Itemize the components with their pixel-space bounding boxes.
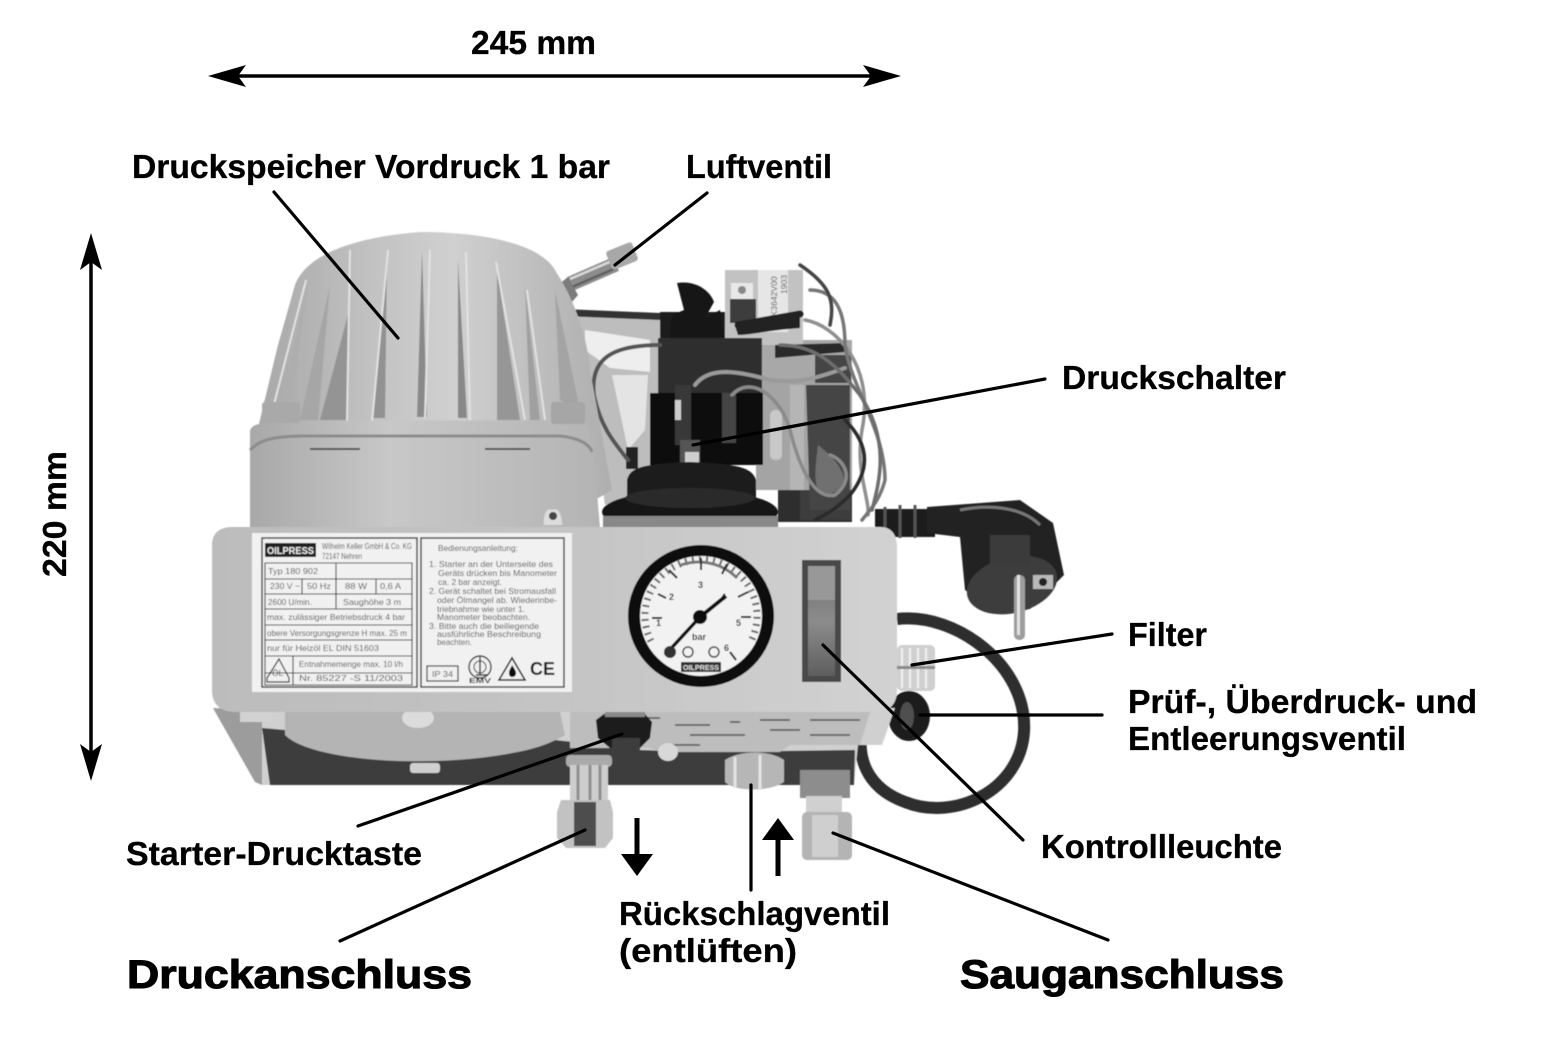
rating plate sticker: Typ 180 902 — [268, 566, 318, 576]
pressure gauge: 4 — [721, 592, 726, 602]
brand logo: OILPRESS — [267, 546, 314, 557]
pressure gauge — [628, 545, 774, 687]
rating plate sticker: Entnahmemenge max. 10 l/h — [299, 659, 403, 669]
check valve — [725, 752, 784, 790]
pressure gauge: OILPRESS — [683, 663, 719, 672]
pressure gauge: 5 — [736, 618, 741, 628]
pressure outlet fitting — [557, 755, 613, 848]
label: Sauganschluss: Sauganschluss — [960, 953, 1284, 997]
operating instructions: ausführliche Beschreibung — [437, 629, 541, 639]
operating instructions — [429, 543, 557, 647]
flame warning triangle — [499, 658, 525, 680]
operating instructions: Bedienungsanleitung: — [438, 543, 518, 553]
rating plate sticker: 88 W — [345, 581, 368, 591]
mains cable and plug — [875, 500, 1064, 640]
suction inlet fitting — [800, 770, 852, 860]
rating plate sticker: Saughöhe 3 m — [343, 597, 401, 607]
rating plate sticker: 2600 U/min. — [268, 597, 312, 607]
operating instructions: oder Ölmangel ab. Wiederinbe- — [437, 595, 557, 605]
test valve knob — [888, 691, 930, 741]
EMV mark — [469, 656, 491, 685]
rating plate sticker: ÖL — [272, 668, 284, 678]
electronics circuit board: 1903 — [779, 275, 789, 294]
label: Druckanschluss: Druckanschluss — [127, 953, 472, 997]
label: Luftventil: Luftventil — [686, 148, 832, 185]
EMV mark: EMV — [469, 678, 491, 685]
pressure tank dome — [258, 232, 612, 500]
operating instructions: Manometer beobachten. — [437, 612, 530, 622]
dimension label: 220 mm: 220 mm — [36, 451, 73, 577]
IP 34 box — [427, 666, 458, 681]
rear bracket and metal backplate — [575, 312, 852, 522]
pressure gauge: 2 — [669, 592, 674, 602]
rating plate sticker: Nr. 85227 -S 11/2003 — [299, 673, 403, 683]
label: Rückschlagventil: (entlüften) — [619, 932, 797, 969]
dimension label: 245 mm: 245 mm — [471, 24, 596, 61]
photo: pump unit — [212, 232, 1064, 860]
label: Prüf-, Überdruck- und Entleerungsventil: Entleerungsventil — [1128, 720, 1406, 757]
rating plate sticker — [252, 533, 572, 692]
label: Druckschalter: Druckschalter — [1062, 359, 1286, 396]
label: Rückschlagventil — [619, 895, 890, 969]
pressure gauge: 1 — [656, 618, 661, 628]
filter — [897, 645, 935, 691]
IP 34 box: IP 34 — [432, 669, 453, 679]
dimension arrow: width — [208, 65, 901, 87]
switch mounting base — [602, 462, 778, 534]
front panel — [212, 527, 897, 712]
operating instructions: beachten. — [437, 637, 472, 647]
rating plate sticker: 72147 Nehren — [322, 551, 362, 561]
arrow: pressure flow down — [621, 818, 653, 876]
rating plate sticker: max. zulässiger Betriebsdruck 4 bar — [267, 612, 405, 622]
rating plate sticker: 230 V ~ — [270, 581, 300, 591]
black lever — [670, 282, 724, 338]
label: Filter: Filter — [1128, 616, 1207, 653]
label: Rückschlagventil: Rückschlagventil — [619, 895, 890, 932]
pressure switch — [626, 338, 763, 472]
label: Prüf-, Überdruck- und Entleerungsventil — [1128, 683, 1477, 757]
operating instructions: triebnahme wie unter 1. — [437, 604, 525, 614]
wires — [594, 265, 885, 520]
pressure gauge: 3 — [698, 580, 703, 590]
rating plate sticker: 50 Hz — [307, 581, 331, 591]
electronics circuit board: 00K3642V00 — [769, 276, 779, 326]
tank housing — [250, 402, 600, 528]
electronics circuit board — [725, 270, 852, 510]
rating plate sticker: obere Versorgungsgrenze H max. 25 m — [267, 628, 407, 638]
operating instructions: Geräts drücken bis Manometer — [438, 568, 557, 578]
label: Druckspeicher: Druckspeicher Vordruck 1 bar — [132, 148, 610, 185]
rating plate sticker: nur für Heizöl EL DIN 51603 — [267, 643, 379, 653]
label: Starter-Drucktaste: Starter-Drucktaste — [126, 835, 422, 872]
pressure gauge: 6 — [724, 643, 729, 653]
oil level control window — [802, 560, 841, 682]
label: Prüf-, Überdruck- und Entleerungsventil: Prüf-, Überdruck- und — [1128, 683, 1477, 720]
starter push button — [596, 712, 652, 750]
pressure gauge: bar — [692, 632, 707, 642]
label: Kontrollleuchte: Kontrollleuchte — [1041, 828, 1282, 865]
operating instructions: ca. 2 bar anzeigt. — [438, 577, 502, 587]
arrow: suction flow up — [762, 818, 794, 876]
operating instructions: 2. Gerät schaltet bei Stromausfall — [429, 586, 556, 596]
leader lines — [274, 192, 1112, 941]
hose — [861, 618, 1024, 808]
air valve — [558, 241, 639, 302]
rating plate sticker: 0,6 A — [380, 581, 401, 591]
CE mark: CE — [530, 659, 555, 679]
underside of unit — [213, 708, 895, 785]
dimension arrow: height — [80, 233, 102, 781]
operating instructions: 3. Bitte auch die beiliegende — [429, 621, 539, 631]
operating instructions: 1. Starter an der Unterseite des — [429, 559, 553, 569]
rating plate sticker: Wilhelm Keller GmbH & Co. KG — [322, 541, 412, 551]
